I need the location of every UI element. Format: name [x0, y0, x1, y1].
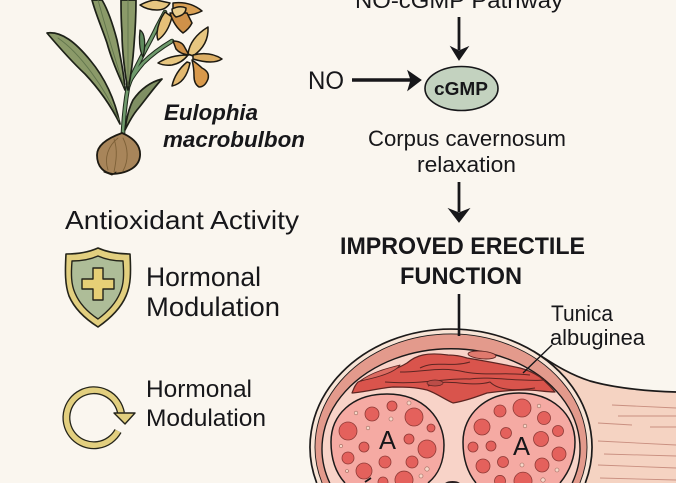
leaf: small lower right — [125, 79, 162, 130]
text: hormonal modulation 2: Hormonal — [146, 376, 252, 403]
species label: macrobulbon — [163, 127, 305, 152]
flower: top — [140, 0, 202, 40]
urethra edge — [446, 482, 459, 483]
lower mark — [365, 478, 371, 482]
illustration: Eulophia macrobulbon plant — [47, 0, 222, 175]
leaf: upright — [121, 0, 136, 90]
label: NO: NO — [308, 67, 344, 95]
shaft — [533, 351, 676, 483]
arrow: NO to cGMP — [352, 71, 421, 90]
inner tissue — [322, 349, 580, 483]
text: hormonal modulation 1: Modulation — [146, 292, 280, 322]
stems — [123, 12, 172, 133]
flower: lower — [158, 27, 222, 87]
leaf: far left — [47, 33, 120, 124]
leader: tunica albuginea — [523, 345, 552, 373]
text: hormonal modulation 1 — [146, 262, 280, 322]
text: corpus cavernosum relaxation: Corpus cavernosum — [368, 126, 566, 151]
heading: Antioxidant Activity: Antioxidant Activity — [65, 205, 299, 235]
arrow: relaxation to outcome — [449, 182, 469, 222]
text: hormonal modulation 1: Hormonal — [146, 262, 261, 292]
leaf: small bract — [139, 30, 145, 57]
species label — [163, 100, 305, 152]
corpus right — [463, 393, 575, 483]
species label: Eulophia — [164, 100, 258, 125]
tunica band — [315, 334, 587, 483]
illustration: cross-section — [310, 294, 676, 483]
text: corpus cavernosum relaxation: relaxation — [417, 152, 516, 177]
text: corpus cavernosum relaxation — [368, 126, 566, 177]
corpus left: A — [379, 425, 397, 455]
leader line — [458, 294, 460, 336]
label: tunica albuginea: albuginea — [550, 325, 646, 350]
text: hormonal modulation 2 — [146, 376, 266, 432]
label: tunica albuginea — [550, 301, 646, 350]
outer sheath — [310, 329, 592, 483]
arrow: pathway to cGMP — [451, 17, 468, 60]
corpus left — [331, 394, 444, 483]
heading: improved erectile function: IMPROVED ERECTILE — [340, 233, 585, 260]
heading: improved erectile function: FUNCTION — [400, 263, 522, 290]
dorsal vessels — [352, 350, 555, 403]
heading: improved erectile function — [340, 233, 585, 290]
icon: shield with cross — [65, 248, 131, 327]
leaf: middle — [92, 0, 125, 90]
bulb — [97, 133, 140, 175]
label: tunica albuginea: Tunica — [551, 301, 614, 326]
text: hormonal modulation 2: Modulation — [146, 405, 266, 432]
corpus right: A — [513, 431, 531, 461]
node: cGMP — [425, 66, 498, 110]
node: cGMP: cGMP — [434, 79, 488, 99]
icon: cycle arrow — [66, 390, 135, 445]
